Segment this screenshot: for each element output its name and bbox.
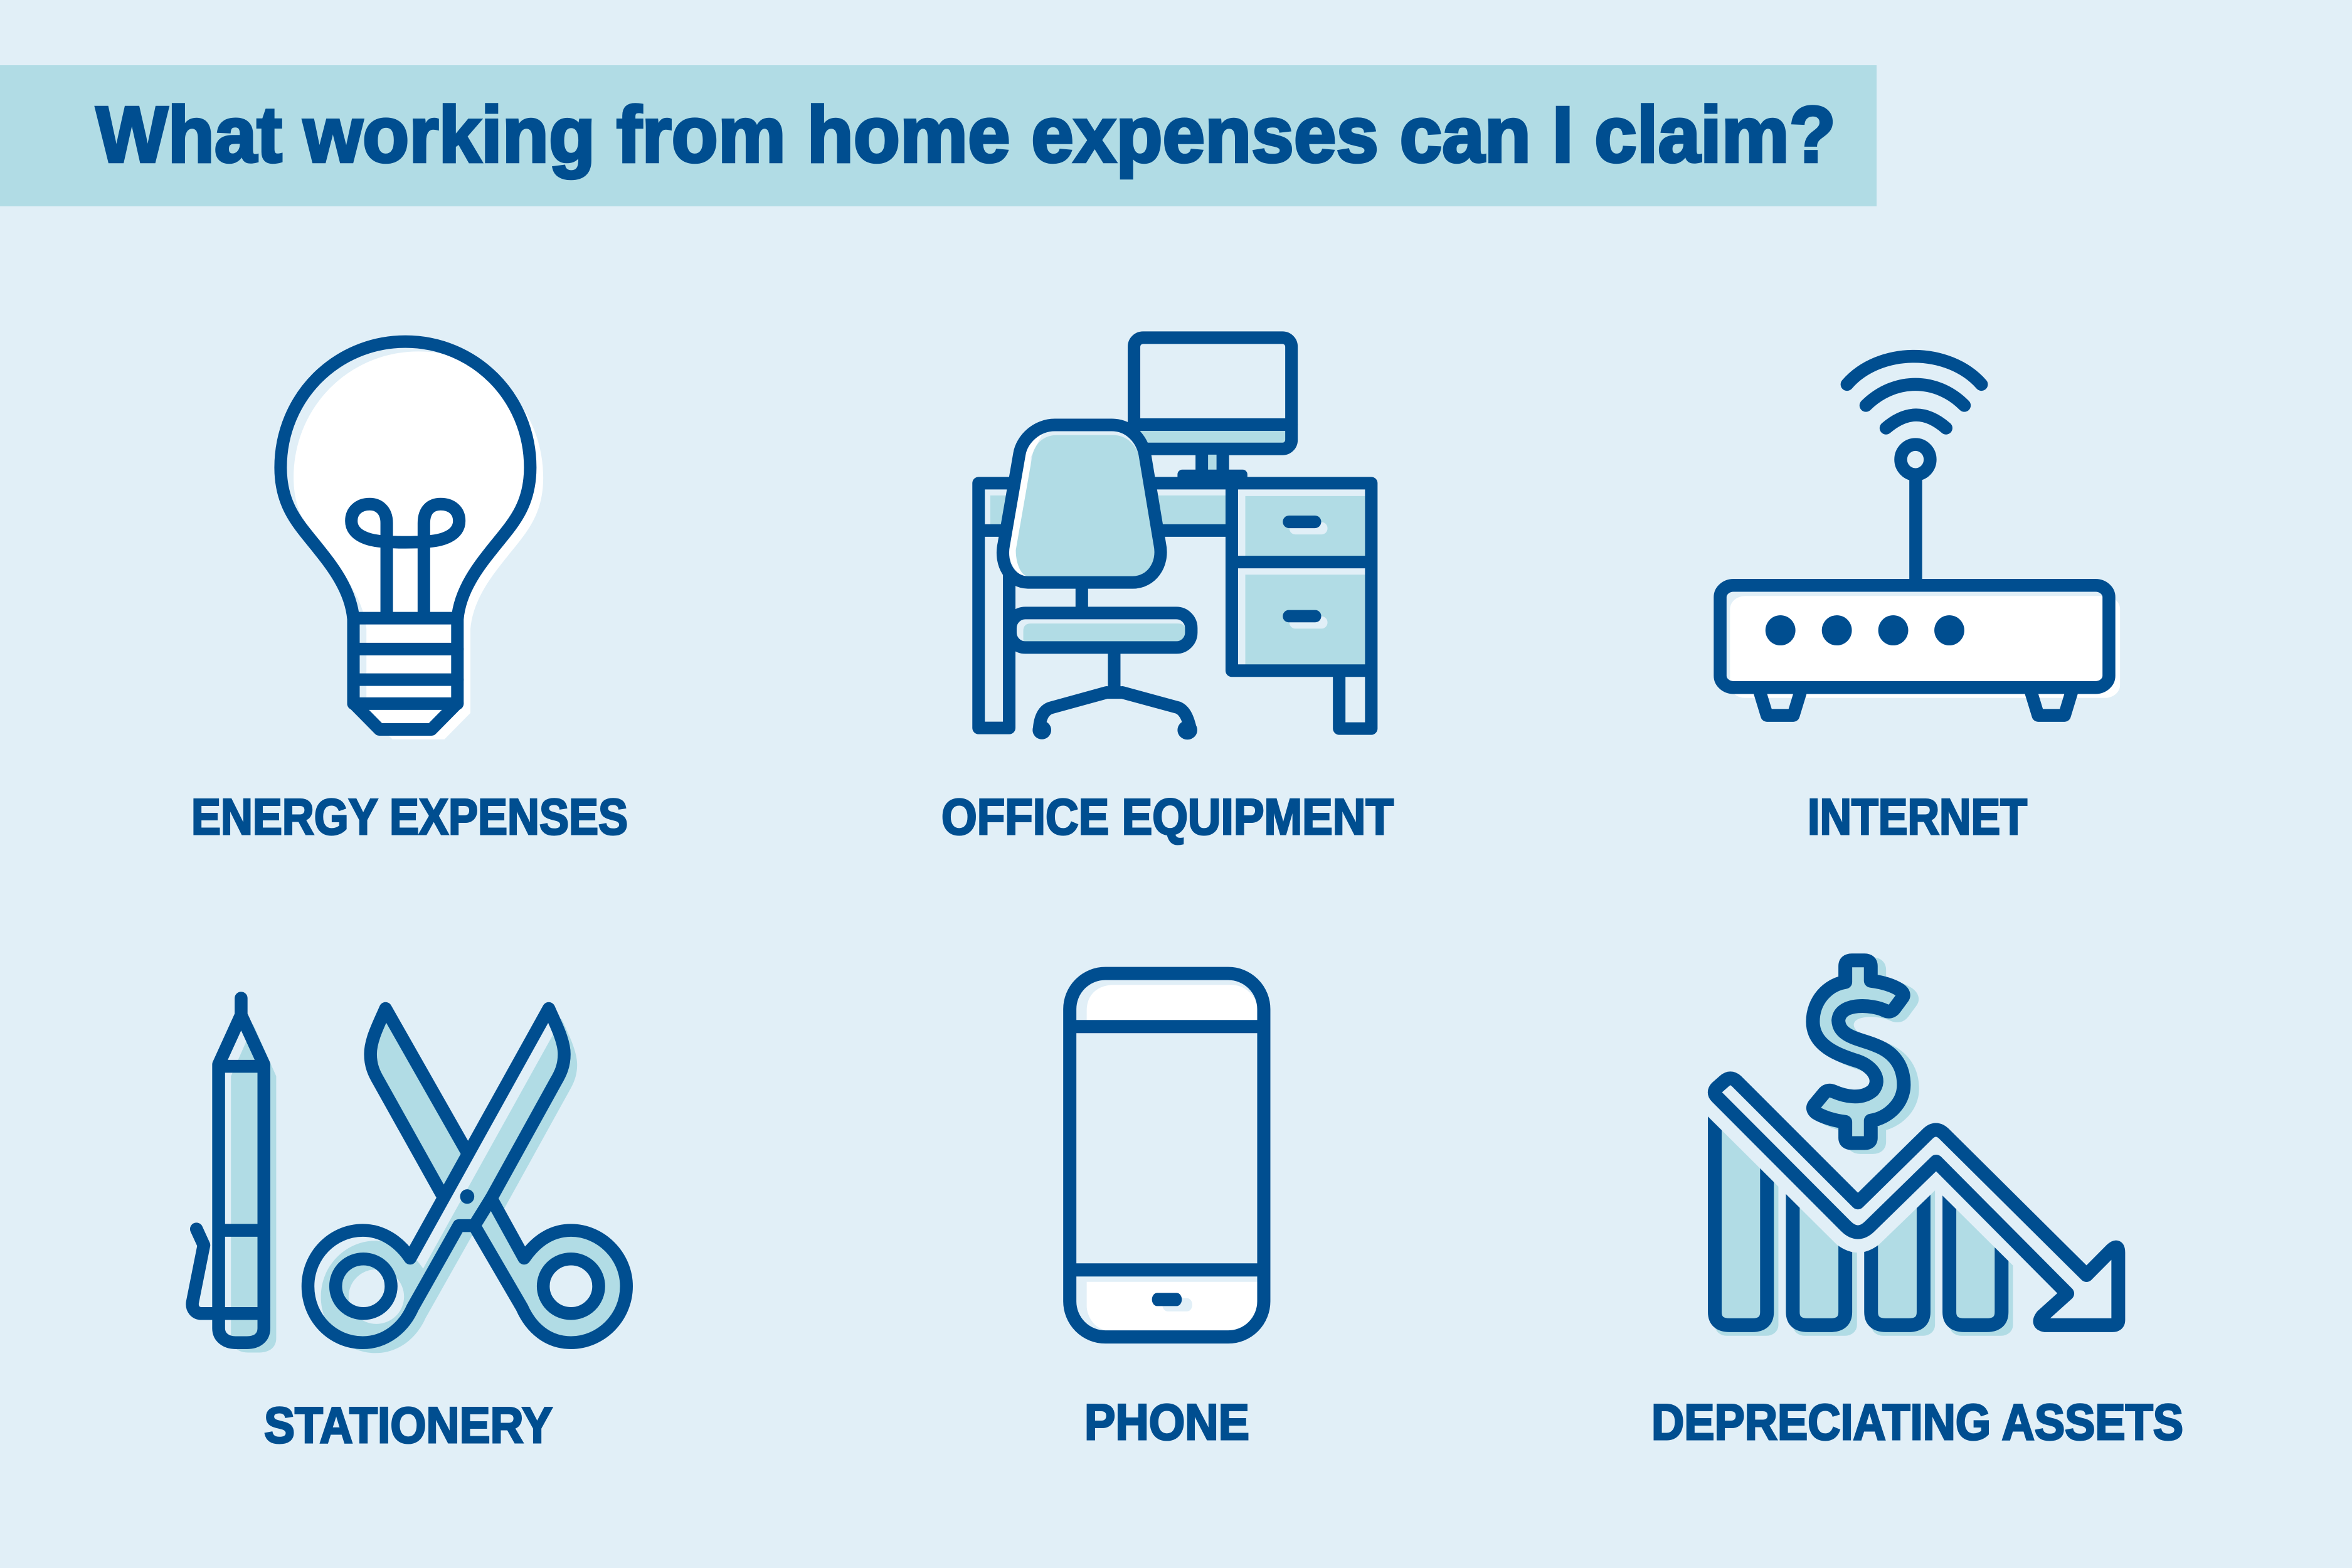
label: stationery: STATIONERY [264,1397,553,1454]
icon: pen [193,998,276,1352]
icon: falling chart with dollar sign [1715,960,2118,1336]
desk [978,483,1371,729]
title banner [0,65,1877,206]
dollar sign [1813,960,1912,1147]
panel: depreciating assets [1651,960,2183,1451]
monitor [1134,337,1291,483]
icon: desk, chair and monitor [978,337,1371,739]
label: energy expenses: ENERGY EXPENSES [191,789,628,845]
icon: scissors [308,1009,627,1353]
label: depreciating assets: DEPRECIATING ASSETS [1651,1394,2183,1451]
label: office equipment: OFFICE EQUIPMENT [941,789,1394,845]
label: internet: INTERNET [1808,789,2027,845]
icon: light bulb [280,342,543,739]
office chair [1003,425,1197,739]
panel: office equipment [941,337,1394,845]
title: What working from home expenses can I claim? [96,90,1836,179]
label: phone: PHONE [1084,1394,1249,1451]
icon: smartphone [1070,973,1264,1337]
panel: phone [1070,973,1264,1451]
falling arrow [1715,1078,2118,1325]
icon: wifi router [1720,356,2120,716]
panel: energy expenses [191,342,628,845]
panel: stationery [193,998,627,1454]
bar chart [1715,1093,2013,1336]
panel: internet [1720,356,2120,845]
